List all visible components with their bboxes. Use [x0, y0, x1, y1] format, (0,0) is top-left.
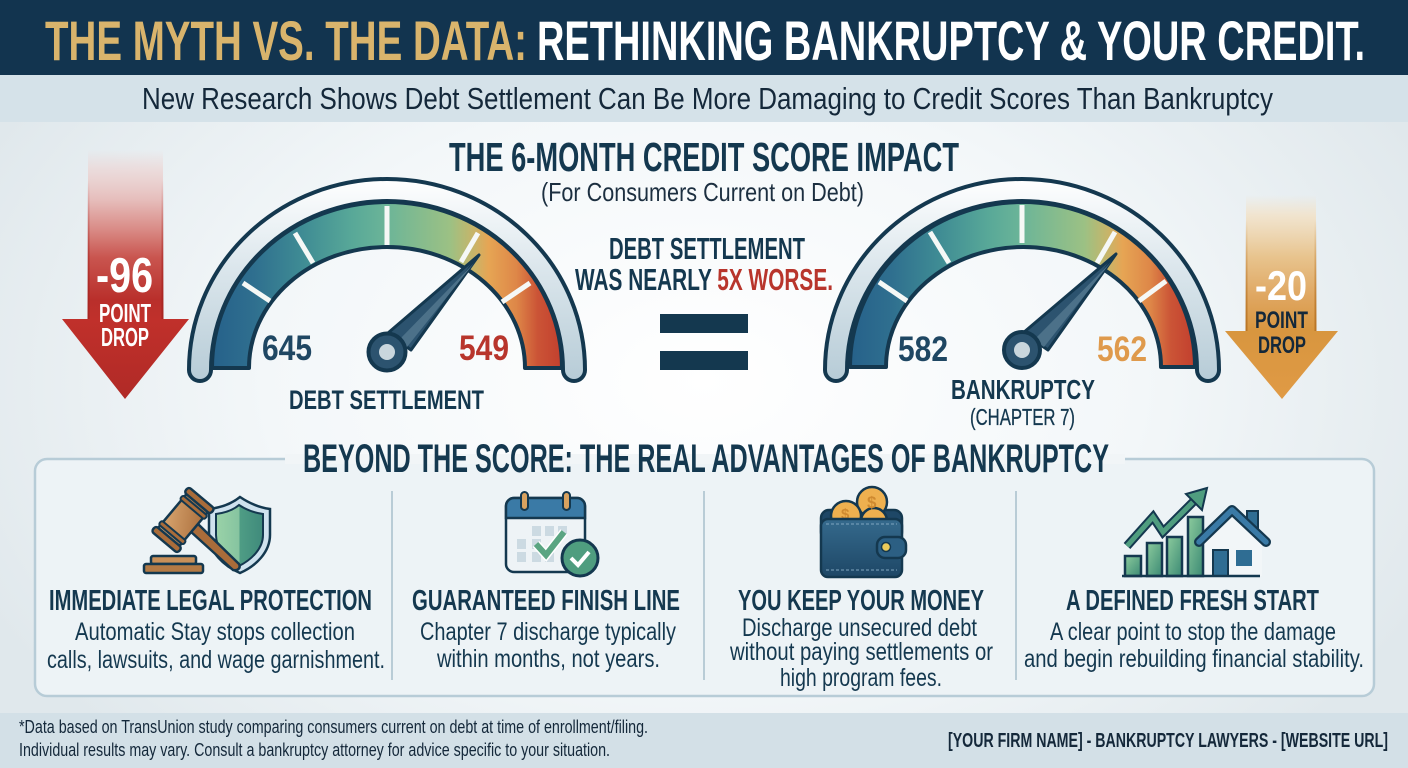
column text	[47, 618, 385, 674]
arrow: -20 point drop: DROP	[1258, 332, 1306, 359]
arrow: -20 point drop: POINT	[1255, 307, 1308, 334]
footnote: *Data based on TransUnion study comparing consumers current on debt at time of enrollment/filing.	[19, 717, 648, 737]
footnote	[19, 717, 648, 760]
column title: IMMEDIATE LEGAL PROTECTION	[49, 585, 372, 617]
comparison callout	[575, 231, 833, 370]
column title: GUARANTEED FINISH LINE	[412, 585, 680, 617]
gauge start score: 582	[898, 330, 948, 369]
gauge needle	[1004, 254, 1116, 368]
column text: without paying settlements or	[729, 638, 993, 666]
column text	[420, 618, 676, 673]
comparison callout: WAS NEARLY 5X WORSE.	[575, 262, 833, 297]
footnote: Individual results may vary. Consult a bankruptcy attorney for advice specific to your situation.	[19, 740, 610, 760]
gauge label: DEBT SETTLEMENT	[289, 385, 484, 415]
icon: wallet with coins: $	[867, 493, 877, 512]
column text: high program fees.	[780, 664, 942, 692]
gauge start score: 645	[262, 329, 312, 368]
column text: calls, lawsuits, and wage garnishment.	[47, 646, 385, 674]
footer band	[0, 713, 1408, 768]
icon: wallet with coins	[821, 487, 906, 577]
column text: A clear point to stop the damage	[1050, 618, 1336, 646]
column title: YOU KEEP YOUR MONEY	[738, 585, 984, 617]
icon: wallet with coins: $	[841, 506, 850, 523]
column text: Discharge unsecured debt	[742, 614, 977, 642]
comparison callout: DEBT SETTLEMENT	[609, 231, 805, 266]
gauge needle	[368, 255, 479, 370]
gauge: debt settlement	[200, 190, 574, 415]
equals sign	[660, 314, 748, 370]
arrow: -20 point drop	[1225, 195, 1338, 399]
section heading: credit score impact: THE 6-MONTH CREDIT SCORE IMPACT	[449, 134, 959, 180]
subtitle band	[0, 75, 1408, 122]
panel: advantages of bankruptcy	[35, 437, 1374, 696]
arrow: -96 point drop	[62, 150, 189, 399]
title: gold part: THE MYTH VS. THE DATA:	[45, 9, 527, 72]
gauge sublabel: (CHAPTER 7)	[970, 404, 1075, 430]
icon: calendar with check	[506, 492, 598, 576]
column text: Chapter 7 discharge typically	[420, 618, 676, 646]
column text	[1024, 618, 1364, 673]
gauge end score: 549	[459, 329, 509, 368]
section subheading: (For Consumers Current on Debt)	[541, 177, 864, 207]
column text: Automatic Stay stops collection	[75, 618, 355, 646]
gauge: bankruptcy	[836, 190, 1208, 430]
column text: within months, not years.	[436, 645, 660, 673]
arrow: -96 point drop: -96	[96, 249, 153, 303]
section heading: credit score impact	[449, 134, 959, 207]
title banner	[0, 0, 1408, 75]
column text	[729, 614, 993, 692]
arrow: -20 point drop: -20	[1255, 262, 1307, 309]
arrow: -96 point drop: DROP	[101, 322, 149, 352]
arrow: -96 point drop: POINT	[99, 298, 151, 328]
icon: gavel and shield	[144, 487, 270, 573]
gauge end score: 562	[1097, 330, 1147, 369]
icon: growth chart and house	[1122, 488, 1266, 576]
gauge label: BANKRUPTCY	[951, 374, 1095, 405]
